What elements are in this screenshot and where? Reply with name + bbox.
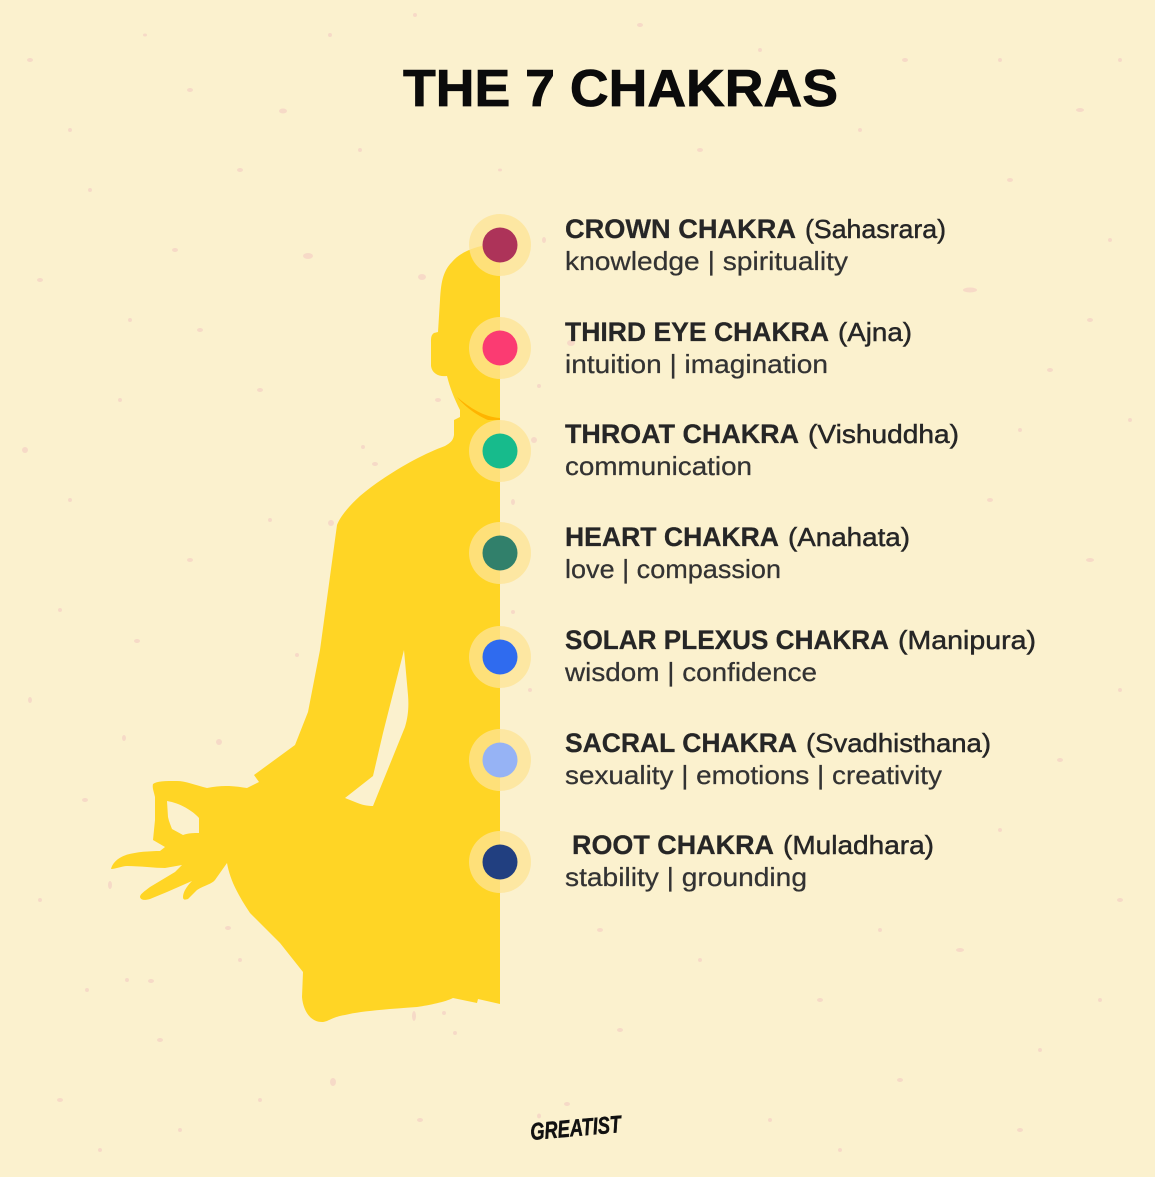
label: heart chakra: love | compassion <box>565 554 781 584</box>
chakra: heart <box>469 522 531 584</box>
chin shadow <box>457 397 500 420</box>
label: root chakra: ROOT CHAKRA <box>572 830 774 860</box>
title: THE 7 CHAKRAS <box>403 60 838 118</box>
chakra: crown <box>469 214 531 276</box>
chakra: third eye <box>469 317 531 379</box>
label: solar plexus chakra: wisdom | confidence <box>564 657 817 687</box>
label: root chakra: stability | grounding <box>565 862 807 892</box>
label: heart chakra: HEART CHAKRA <box>565 522 779 552</box>
label: crown chakra: CROWN CHAKRA <box>565 214 796 244</box>
label: root chakra: (Muladhara) <box>783 830 934 860</box>
label: heart chakra: (Anahata) <box>788 522 910 552</box>
label: crown chakra: (Sahasrara) <box>805 214 946 244</box>
meditating figure silhouette <box>111 243 500 1022</box>
label: third eye chakra: (Ajna) <box>838 317 912 347</box>
label: throat chakra <box>565 419 959 481</box>
label: solar plexus chakra <box>564 625 1036 687</box>
label: sacral chakra: sexuality | emotions | creativity <box>565 760 942 790</box>
label: crown chakra: knowledge | spirituality <box>565 246 848 276</box>
label: sacral chakra <box>565 728 991 790</box>
label: crown chakra <box>565 214 946 276</box>
label: sacral chakra: (Svadhisthana) <box>806 728 991 758</box>
label: solar plexus chakra: SOLAR PLEXUS CHAKRA <box>565 625 889 655</box>
chakra: throat <box>469 420 531 482</box>
label: throat chakra: (Vishuddha) <box>808 419 959 449</box>
label: root chakra <box>565 830 934 892</box>
chakra: sacral <box>469 729 531 791</box>
label: third eye chakra <box>565 317 912 379</box>
label: solar plexus chakra: (Manipura) <box>898 625 1036 655</box>
logo: Greatist: GREATIST <box>529 1111 624 1146</box>
label: throat chakra: communication <box>565 451 752 481</box>
chakra: solar plexus <box>469 626 531 688</box>
chakra: root <box>469 831 531 893</box>
label: third eye chakra: THIRD EYE CHAKRA <box>565 317 829 347</box>
label: heart chakra <box>565 522 910 584</box>
label: third eye chakra: intuition | imagination <box>565 349 828 379</box>
label: throat chakra: THROAT CHAKRA <box>565 419 799 449</box>
label: sacral chakra: SACRAL CHAKRA <box>565 728 797 758</box>
